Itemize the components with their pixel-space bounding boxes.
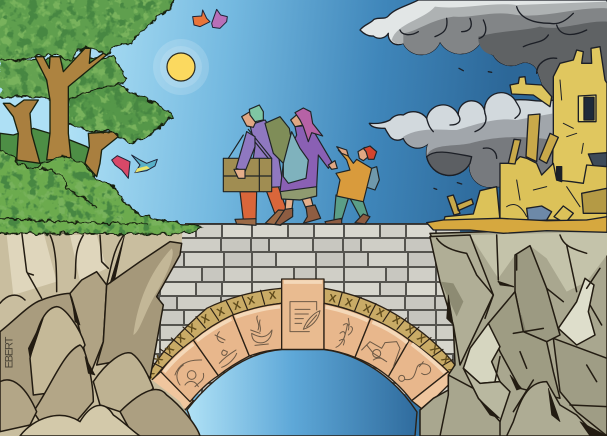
woman's headscarf [295, 108, 323, 142]
stone: food and water [193, 315, 249, 376]
child's backpack [365, 167, 379, 190]
white spire [558, 278, 595, 345]
dark left wedge [441, 282, 463, 317]
x marks on band stones: X [390, 313, 403, 328]
left boulder [0, 293, 87, 422]
woman's legs [285, 197, 313, 212]
x marks on band stones: X [175, 331, 188, 346]
low building [500, 157, 607, 220]
x marks on band stones: X [374, 306, 386, 320]
x marks on band stones: X [328, 292, 338, 306]
x marks on band stones: X [200, 312, 212, 326]
foreground bush [0, 148, 202, 234]
arch of keystones [147, 279, 455, 410]
large diagonal spire [97, 242, 182, 378]
man's boots [235, 210, 293, 225]
trees and foliage [0, 0, 202, 234]
stone: bowl [233, 303, 282, 356]
top canopy [0, 0, 177, 62]
arch opening [187, 350, 417, 436]
x marks on band stones: X [152, 353, 166, 367]
upper left facet [430, 235, 493, 365]
mustard band of x-marked stones [147, 288, 282, 382]
central dark facet [515, 246, 560, 342]
man's backpack [265, 117, 294, 163]
standing planks [526, 114, 540, 162]
dark crevices [28, 233, 125, 375]
x marks on band stones: X [215, 305, 227, 319]
tower window [578, 95, 596, 122]
signature: EBERT [4, 336, 16, 368]
stone: shelter [355, 318, 409, 377]
lower smoke mid layer [403, 113, 553, 187]
stone: helping hands [161, 340, 218, 402]
rubble beams [447, 195, 497, 223]
x marks on band stones: X [268, 289, 278, 302]
back lower foliage [0, 128, 100, 180]
left tree trunk [3, 100, 40, 163]
lower smoke darkest puff [427, 152, 472, 175]
child's jacket [336, 149, 372, 202]
x marks on band stones: X [427, 343, 441, 357]
rubble block [554, 206, 573, 223]
spire lower body [463, 368, 510, 422]
woman's coat [280, 125, 332, 192]
tower side window [588, 153, 607, 167]
upper light band [470, 232, 607, 292]
lower smoke dark layer [427, 137, 553, 187]
child's red hat [363, 146, 377, 159]
woman's boots [275, 205, 321, 225]
box straps [228, 129, 272, 158]
blue rubble [527, 206, 552, 222]
rubble ground [427, 217, 607, 233]
icon: water drop and hand [215, 332, 237, 367]
man's legs [240, 187, 287, 220]
ruined buildings and smoke [360, 0, 607, 233]
icon strokes on the stones [175, 302, 431, 387]
boulder front [33, 345, 93, 425]
man's arm [236, 132, 255, 172]
right boulders [93, 353, 153, 412]
x marks on band stones: X [163, 342, 177, 357]
bottom facet [507, 382, 597, 436]
lighter stone rims [164, 282, 445, 373]
smoke light layer [360, 0, 607, 107]
man's green cap [249, 105, 263, 122]
x marks on band stones: X [186, 321, 199, 336]
keystone: document and quill [282, 279, 324, 350]
right facet below spire [553, 338, 607, 436]
bridge parapet line [185, 223, 435, 225]
smoke darkest layer [478, 22, 607, 107]
child's pointing hand [337, 147, 348, 156]
spire highlight [133, 248, 173, 335]
icon: stethoscope [399, 362, 431, 381]
x marks on band stones: X [144, 367, 158, 381]
family of refugees [223, 105, 379, 225]
stone bridge wall [150, 224, 460, 394]
middle spire [70, 272, 107, 375]
right tree trunk [85, 132, 118, 177]
pink bird [112, 156, 130, 178]
man's coat [250, 120, 283, 192]
child's legs [334, 195, 368, 220]
large central trunk [35, 48, 107, 160]
sun [153, 39, 209, 95]
debris specks [434, 68, 492, 189]
cardboard box [223, 158, 272, 192]
x marks on band stones: X [232, 299, 243, 313]
man's hand [234, 169, 245, 178]
birds [112, 9, 227, 178]
smoke outline [400, 7, 587, 73]
cliff wall [0, 225, 200, 436]
man's face [242, 112, 257, 127]
cracks on wall [0, 232, 125, 303]
blue and yellow bird [132, 155, 157, 173]
left cliff rocks [0, 225, 200, 436]
lower smoke outlines [427, 100, 520, 158]
lower smoke cloud [369, 93, 553, 187]
woman's skirt [280, 187, 317, 200]
x marks on band stones: X [414, 332, 428, 346]
lower left boulder [0, 380, 37, 432]
joined hands [328, 161, 337, 169]
mid facet [488, 292, 560, 398]
planks stack [582, 188, 607, 213]
stone: stethoscope [388, 340, 448, 401]
slanted plank [539, 133, 558, 163]
right band of x-marked stones [324, 288, 455, 378]
child [325, 146, 379, 224]
band separators [150, 290, 453, 368]
smoke dark layer [403, 8, 607, 107]
light boulder [30, 307, 85, 395]
cliff base [420, 228, 607, 436]
x marks on band stones: X [445, 364, 460, 377]
child's boots [325, 214, 370, 224]
tower window glass [584, 97, 594, 120]
doorway shadow [557, 167, 562, 182]
dark crevices [447, 282, 607, 436]
upper smoke cloud [360, 0, 607, 107]
x marks on band stones: X [344, 296, 354, 310]
central shadow [508, 315, 526, 332]
smoke mid layer [392, 2, 607, 107]
back foliage [0, 57, 127, 100]
back wall ruin [510, 77, 552, 107]
purple bird [212, 9, 227, 28]
tower [552, 47, 607, 220]
woman's shoulder bag [283, 132, 308, 183]
stone: wheat [324, 303, 371, 357]
rubble heap [443, 187, 500, 223]
woman's face [291, 113, 303, 127]
icon: steaming bowl [251, 316, 272, 345]
man [223, 105, 294, 225]
light spire [463, 323, 500, 383]
bottom light rock [20, 405, 140, 436]
child's face [358, 147, 368, 161]
x marks on band stones [144, 289, 460, 381]
lower smoke light layer [369, 93, 553, 187]
lower right boulder [120, 390, 200, 436]
orange bird [193, 10, 210, 27]
icon: document and quill [290, 302, 320, 332]
lower left facet [440, 375, 500, 436]
icon: house and mountains [362, 342, 400, 367]
cracks [437, 235, 607, 412]
x marks on band stones: X [362, 302, 373, 316]
short plank [508, 139, 521, 164]
woman [275, 108, 337, 225]
middle canopy [68, 85, 173, 143]
right cliff rocks [420, 228, 607, 436]
right foot stone [412, 372, 455, 410]
icon: hands around person [175, 360, 204, 387]
x marks on band stones: X [403, 322, 417, 337]
icon: wheat [336, 318, 352, 347]
left foot stone [150, 372, 193, 410]
x marks on band stones: X [246, 294, 257, 308]
x marks on band stones: X [438, 353, 453, 367]
building cracks [507, 80, 583, 217]
highlights on wall [7, 232, 107, 295]
